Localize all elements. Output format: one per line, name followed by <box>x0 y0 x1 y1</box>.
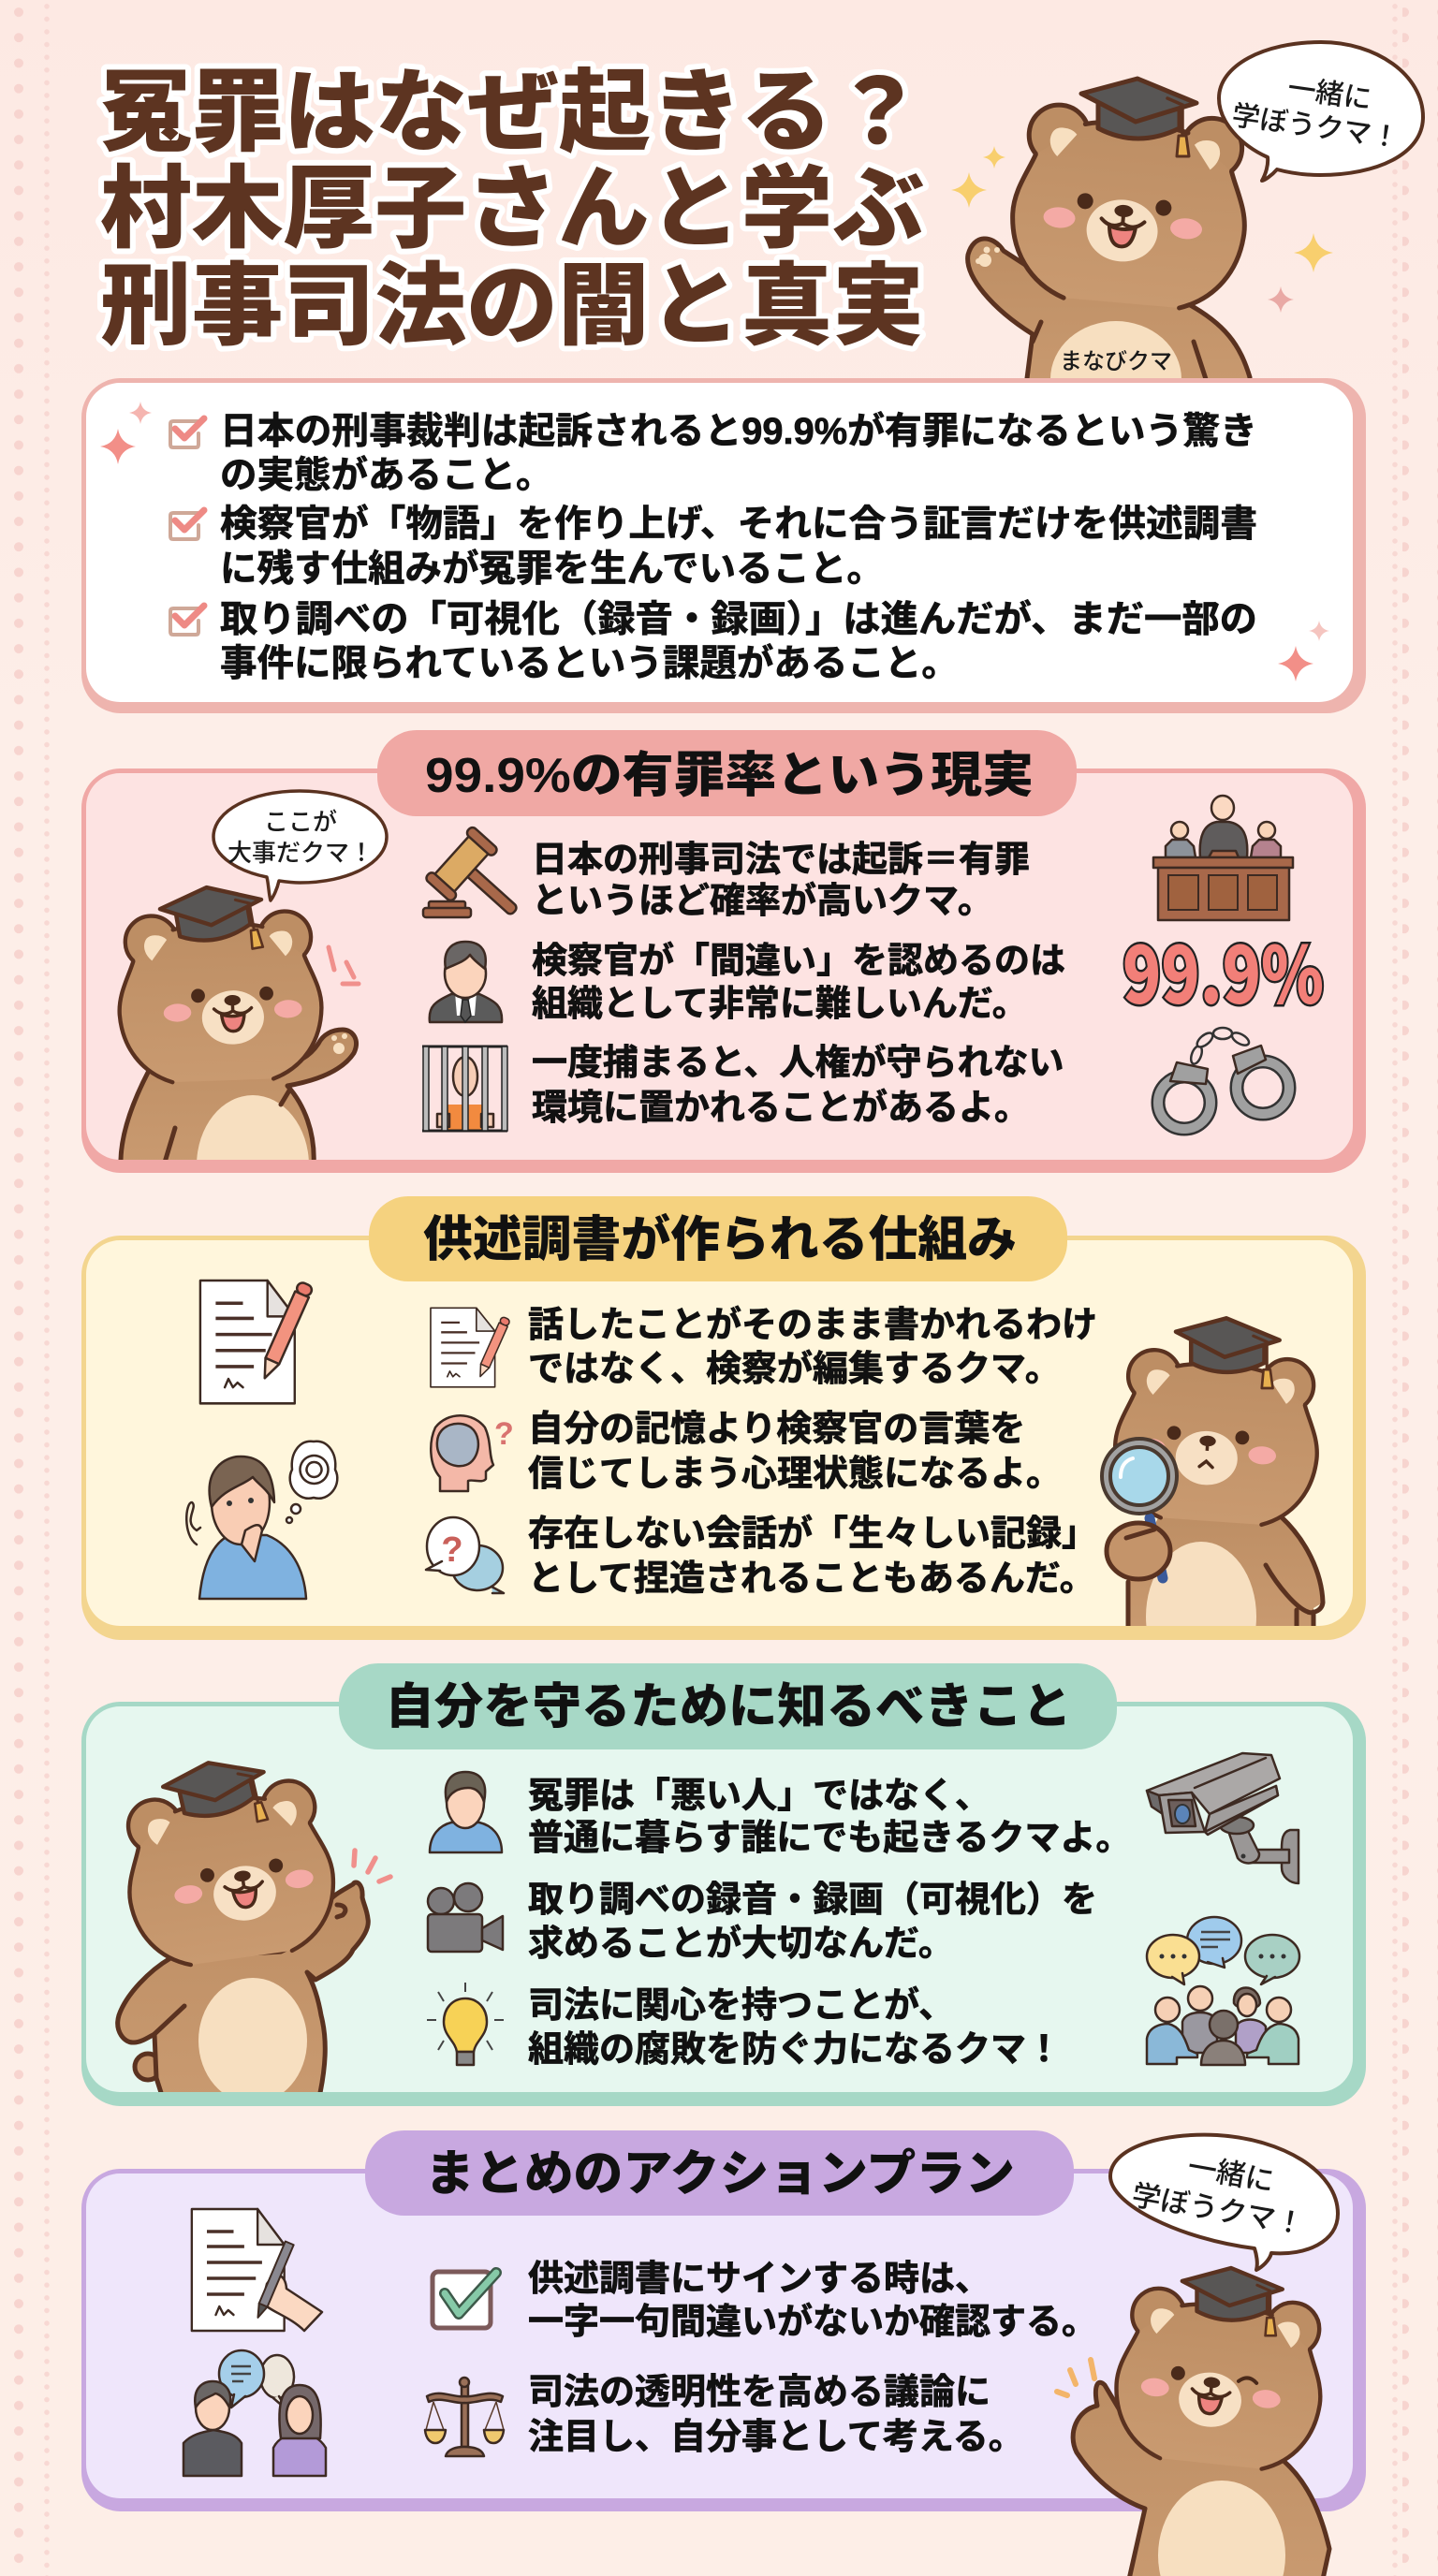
panel: protect yourself <box>81 1663 1366 2106</box>
bear: magnifying glass <box>1100 1316 1326 1626</box>
panel: summary <box>81 378 1366 713</box>
sparkles: top <box>951 146 1333 313</box>
icon: signing document <box>192 2209 322 2331</box>
speech bubble: bottom: 一緒に <box>1185 2150 1277 2198</box>
text: conviction rate: 環境に置かれることがあるよ。 <box>532 1089 1030 1128</box>
icon: prosecutor <box>430 942 502 1022</box>
panel: action plan <box>81 2130 1366 2511</box>
title: 冤罪はなぜ起きる？ <box>100 63 924 163</box>
text: protect yourself: 組織の腐敗を防ぐ力になるクマ！ <box>528 2030 1062 2070</box>
text: conviction rate <box>532 841 1065 1128</box>
bear: pointing up <box>117 886 360 1160</box>
heading pill: 99.9%の有罪率という現実 <box>425 749 1034 803</box>
speech bubble: top: 一緒に <box>1285 73 1373 115</box>
icon: checkbox <box>433 2272 496 2328</box>
icon: brain <box>431 1415 514 1491</box>
icon: brain: ? <box>494 1416 514 1452</box>
icon: two people talking <box>183 2350 326 2476</box>
heading pill: 自分を守るために知るべきこと <box>386 1680 1071 1734</box>
icon: document and pen large <box>200 1281 314 1403</box>
text: protect yourself: 求めることが大切なんだ。 <box>528 1925 954 1964</box>
text: conviction rate: 一度捕まると、人権が守られない <box>532 1044 1064 1083</box>
speech bubble: 大事だクマ！ <box>227 839 374 867</box>
icon: person behind bars <box>422 1046 507 1131</box>
text: action plan: 供述調書にサインする時は、 <box>528 2260 990 2299</box>
panel: statements <box>81 1196 1366 1640</box>
text: statements: 信じてしまう心理状態になるよ。 <box>528 1455 1062 1494</box>
text: statements: 話したことがそのまま書かれるわけ <box>528 1306 1097 1345</box>
icon: handcuffs <box>1158 1028 1289 1129</box>
emphasis marks <box>329 947 359 984</box>
text: conviction rate: というほど確率が高いクマ。 <box>532 882 993 921</box>
mascot: top bear waving <box>968 79 1254 437</box>
text: conviction rate: 組織として非常に難しいんだ。 <box>532 985 1028 1024</box>
icon: small document <box>431 1308 510 1387</box>
icon: person <box>430 1772 502 1852</box>
title: 村木厚子さんと学ぶ <box>100 159 924 259</box>
icon: question bubbles: ? <box>441 1530 463 1570</box>
bear: thumbs up <box>1073 2268 1330 2576</box>
text: protect yourself: 取り調べの録音・録画（可視化）を <box>528 1881 1097 1920</box>
icon: light bulb <box>427 1983 504 2065</box>
text: conviction rate: 日本の刑事司法では起訴＝有罪 <box>532 841 1030 880</box>
text: conviction rate: 検察官が「間違い」を認めるのは <box>532 942 1065 981</box>
text: action plan: 一字一句間違いがないか確認する。 <box>528 2303 1097 2342</box>
label: まなびクマ: まなびクマ <box>1060 349 1172 374</box>
summary text: に残す仕組みが冤罪を生んでいること。 <box>220 549 884 590</box>
text: protect yourself: 冤罪は「悪い人」ではなく、 <box>528 1777 990 1816</box>
heading pill <box>365 2130 1074 2216</box>
heading pill <box>369 1196 1067 1281</box>
icon: question bubbles <box>426 1517 504 1593</box>
icon: discussion group <box>1147 1917 1299 2065</box>
text: statements: として捏造されることもあるんだ。 <box>528 1559 1095 1599</box>
icon: scales <box>425 2378 504 2456</box>
bear: pointing finger <box>117 1751 368 2103</box>
text: statements: 自分の記憶より検察官の言葉を <box>528 1410 1025 1449</box>
text: statements <box>528 1306 1097 1599</box>
speech bubble <box>213 791 387 900</box>
speech bubble: ここが <box>264 808 337 836</box>
title <box>100 63 924 357</box>
title: 刑事司法の闇と真実 <box>100 256 924 357</box>
speech bubble: bottom: 学ぼうクマ！ <box>1129 2178 1307 2241</box>
icon: gavel <box>423 826 538 938</box>
summary text: 取り調べの「可視化（録音・録画）」は進んだが、まだ一部の <box>220 599 1257 640</box>
heading pill: 供述調書が作られる仕組み <box>423 1212 1017 1267</box>
heading pill <box>377 730 1077 816</box>
emphasis marks <box>354 1851 390 1881</box>
panel: conviction rate <box>81 730 1366 1173</box>
text: protect yourself: 司法に関心を持つことが、 <box>528 1986 954 2026</box>
checkboxes <box>170 418 204 635</box>
text: statements: ではなく、検察が編集するクマ。 <box>528 1350 1061 1389</box>
text: action plan <box>528 2260 1097 2457</box>
summary text: の実態があること。 <box>220 455 552 496</box>
summary text: 事件に限られているという課題があること。 <box>220 643 959 684</box>
icon: court bench <box>1153 796 1293 920</box>
icon: security camera <box>1147 1753 1299 1883</box>
speech bubble: top: 学ぼうクマ！ <box>1230 100 1401 154</box>
emphasis marks <box>1057 2360 1094 2395</box>
icon: video camera <box>428 1883 503 1952</box>
text: protect yourself <box>528 1777 1131 2070</box>
icon: man thinking <box>186 1442 337 1599</box>
summary text: 日本の刑事裁判は起訴されると99.9%が有罪になるという驚き <box>220 411 1257 452</box>
summary text: 検察官が「物語」を作り上げ、それに合う証言だけを供述調書 <box>220 504 1257 545</box>
heading pill: まとめのアクションプラン <box>425 2147 1015 2202</box>
speech bubble: bottom <box>1110 2135 1338 2270</box>
sparkles: summary <box>100 402 1329 681</box>
speech bubble: top <box>1219 42 1423 181</box>
text: protect yourself: 普通に暮らす誰にでも起きるクマよ。 <box>528 1819 1131 1858</box>
big number 99.9%: 99.9% <box>1123 914 1324 1027</box>
summary text <box>220 411 1257 684</box>
text: action plan: 注目し、自分事として考える。 <box>528 2418 1024 2457</box>
text: action plan: 司法の透明性を高める議論に <box>528 2373 990 2412</box>
text: statements: 存在しない会話が「生々しい記録」 <box>528 1515 1097 1554</box>
heading pill <box>339 1663 1117 1749</box>
